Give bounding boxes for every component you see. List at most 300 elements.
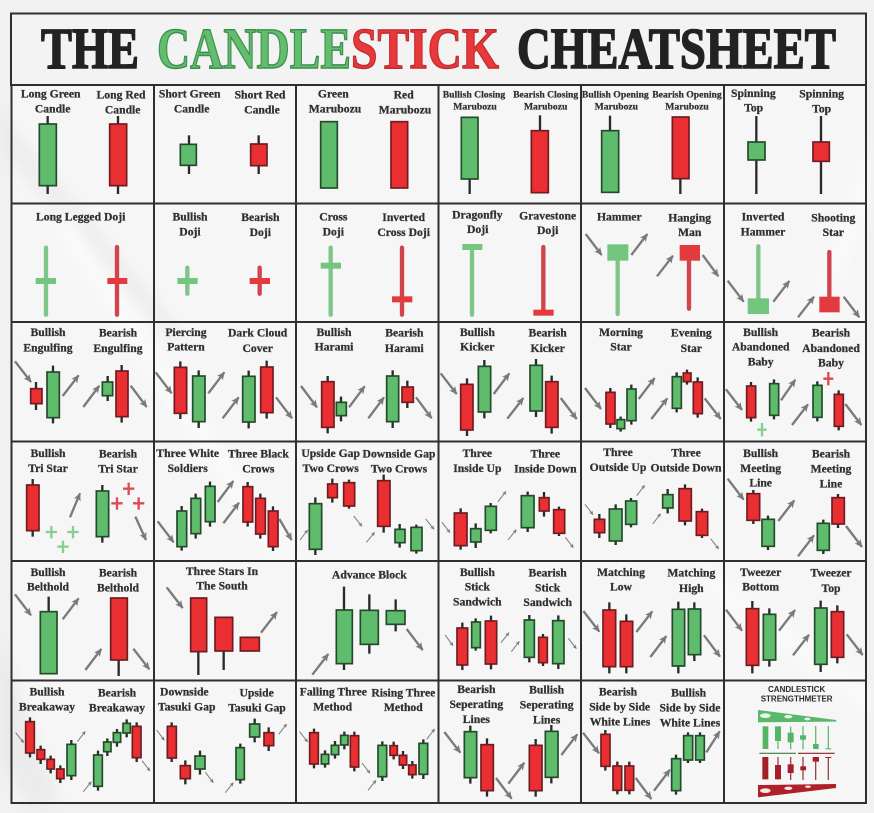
- label: Bearish Tri Star: Bearish: [99, 448, 138, 461]
- label: Bearish Engulfing: Engulfing: [93, 342, 143, 355]
- label: Three Inside Down: Three: [531, 448, 560, 461]
- label: Bullish Engulfing: Bullish: [30, 326, 66, 339]
- arrow: [501, 633, 509, 643]
- panel: long candles: [21, 88, 146, 194]
- arrow: [846, 526, 862, 547]
- label: Bullish Side by Side White Lines: White Lines: [660, 716, 721, 729]
- panel: opening marubozu: [582, 90, 722, 194]
- panel: spinning tops: [731, 87, 844, 194]
- candles: bearish harami: [387, 370, 413, 428]
- heading: strengthmeter: STRENGTHMETER: [761, 694, 833, 703]
- label: Bearish Meeting Line: Meeting: [811, 463, 852, 476]
- label: Bearish Doji: Bearish: [241, 211, 280, 224]
- arrow: [63, 375, 79, 396]
- label: Bearish Stick Sandwich: Bearish: [529, 567, 567, 580]
- bear banner: [758, 784, 836, 797]
- panel: abandoned baby: [726, 326, 861, 436]
- panel: three methods: [300, 686, 435, 790]
- label: Shooting Star: Shooting: [811, 211, 856, 224]
- arrow up: [657, 256, 673, 276]
- arrow: [16, 733, 24, 743]
- candles: tweezer top: [815, 601, 844, 672]
- arrow: [70, 493, 80, 517]
- panel: cross doji: [319, 210, 431, 315]
- arrow: [362, 763, 370, 773]
- panel: side by side: [583, 686, 721, 799]
- candles: bullish abandoned baby: [747, 379, 779, 436]
- panel: bullish bearish doji: [172, 210, 280, 294]
- label: Bearish Closing Marubozu: Bearish Closing: [513, 90, 578, 101]
- label: Downside Gap Two Crows: Two Crows: [371, 463, 428, 476]
- label: Bearish Opening Marubozu: Marubozu: [665, 101, 709, 112]
- arrow: [279, 724, 287, 734]
- label: Matching Low: Low: [610, 581, 633, 594]
- bull banner: [758, 710, 836, 722]
- label: Bearish Tri Star: Tri Star: [98, 463, 138, 476]
- title: [11, 14, 866, 85]
- arrow: [156, 372, 172, 393]
- label: Hanging Man: Hanging: [668, 211, 711, 224]
- candle: inverted hammer: [748, 246, 769, 314]
- arrow: [416, 397, 432, 418]
- panel: hammer hanging man: [586, 210, 718, 314]
- label: Tweezer Top: Tweezer: [810, 567, 852, 580]
- candle: green doji: [36, 248, 56, 315]
- label: Bearish Breakaway: Bearish: [98, 686, 137, 699]
- candle: dragonfly: [462, 244, 482, 315]
- arrow: [223, 503, 239, 523]
- candles: bearish tri star: [96, 483, 144, 543]
- arrow: [208, 372, 224, 393]
- arrow: [639, 378, 655, 399]
- arrow: [793, 635, 809, 655]
- arrow: [366, 532, 375, 542]
- label: Gravestone Doji: Doji: [537, 224, 559, 237]
- arrow: [781, 380, 795, 400]
- bullish strength candles: [763, 726, 831, 749]
- arrow: [798, 535, 814, 556]
- title: STICK: [351, 16, 499, 81]
- label: Falling Three Method: Method: [313, 700, 353, 713]
- arrow: [792, 404, 808, 425]
- label: Tweezer Bottom: Bottom: [742, 581, 779, 594]
- label: Bearish Seperating Lines: Seperating: [449, 698, 503, 711]
- candle: bullish doji: [177, 268, 198, 294]
- label: Bearish Kicker: Bearish: [529, 327, 567, 340]
- label: Inverted Cross Doji: Inverted: [382, 211, 426, 224]
- arrow: [585, 388, 601, 409]
- arrow: [301, 386, 317, 407]
- label: Three White Soldiers: Three White: [156, 447, 219, 460]
- panel: engulfing: [15, 326, 147, 423]
- arrow: [636, 611, 652, 632]
- arrow: [653, 514, 661, 524]
- candles: upside gap two crows: [309, 479, 355, 555]
- candles: upside tasuki gap: [236, 719, 274, 784]
- label: Three Outside Up: Outside Up: [590, 461, 647, 474]
- arrow: [711, 539, 719, 549]
- label: Bearish Kicker: Kicker: [531, 342, 565, 355]
- label: Upside Tasuki Gap: Upside: [239, 686, 274, 699]
- arrow: [279, 519, 292, 540]
- arrow: [637, 485, 645, 496]
- label: Hanging Man: Man: [678, 226, 702, 239]
- arrow: [63, 598, 79, 619]
- label: Bullish Meeting Line: Meeting: [740, 462, 781, 475]
- label: Long Red Candle: Long Red: [97, 88, 146, 101]
- candles: bullish tri star: [27, 479, 79, 553]
- arrow down: [703, 255, 718, 276]
- label: Bullish Kicker: Bullish: [460, 326, 495, 339]
- arrow: [427, 729, 435, 739]
- candle: bearish closing: [531, 115, 548, 193]
- arrow: [496, 778, 512, 799]
- arrow: [498, 491, 506, 502]
- arrow: [706, 731, 720, 752]
- label: Bearish Meeting Line: Line: [820, 477, 842, 490]
- label: Matching Low: Matching: [597, 566, 645, 579]
- arrow: [568, 638, 576, 649]
- candle: bullish opening: [602, 116, 619, 192]
- label: Bearish Stick Sandwich: Stick: [535, 581, 561, 594]
- label: Green Marubozu: Marubozu: [309, 103, 362, 116]
- arrow: [585, 504, 593, 515]
- arrow: [77, 731, 85, 742]
- arrow: [407, 629, 423, 650]
- label: Three Outside Up: Three: [603, 446, 633, 459]
- candle: red marubozu: [391, 122, 408, 188]
- arrow: [847, 634, 863, 655]
- label: Bearish Engulfing: Bearish: [99, 327, 138, 340]
- label: Three Black Crows: Three Black: [228, 448, 289, 461]
- candles: advance block: [336, 587, 405, 670]
- label: Inverted Cross Doji: Cross Doji: [377, 226, 431, 239]
- label: Spinning Top green: Spinning: [731, 87, 776, 100]
- candles: bullish engulfing: [31, 366, 59, 423]
- label: Bullish Side by Side White Lines: Bullish: [671, 686, 707, 699]
- candle: inverted cross doji: [392, 248, 412, 315]
- candles: evening star: [672, 370, 702, 418]
- candle: cross doji: [321, 248, 341, 315]
- label: Short Red Candle: Short Red: [235, 88, 286, 101]
- candle: green marubozu: [321, 122, 337, 188]
- bearish strength candles: [762, 757, 831, 780]
- label: Matching High: High: [679, 582, 704, 595]
- label: Bullish Abandoned Baby: Bullish: [743, 326, 779, 339]
- panel: tasuki gap: [157, 686, 287, 793]
- label: Bearish Abandoned Baby: Bearish: [812, 327, 851, 340]
- label: Bullish Breakaway: Breakaway: [19, 701, 75, 714]
- candle: red doji: [107, 247, 127, 315]
- label: Rising Three Method: Method: [384, 701, 423, 714]
- candle: hanging man: [680, 245, 700, 309]
- panel: long legged doji: [36, 210, 127, 315]
- arrow: [779, 610, 795, 631]
- arrow: [225, 783, 233, 793]
- label: Tweezer Top: Top: [821, 582, 841, 595]
- candles: three white soldiers: [177, 482, 215, 551]
- arrow: [83, 386, 99, 407]
- arrow: [726, 389, 742, 410]
- candles: downside tasuki gap: [167, 722, 205, 784]
- candles: bearish meeting line: [817, 494, 844, 554]
- panel: gap two crows: [300, 447, 436, 555]
- label: Bullish Harami: Bullish: [316, 326, 352, 339]
- title: THE: [41, 16, 139, 81]
- label: Red Marubozu: Red: [394, 88, 414, 101]
- label: Bearish Seperating Lines: Lines: [463, 713, 490, 726]
- arrow: [261, 612, 277, 633]
- label: Bullish Stick Sandwich: Bullish: [460, 566, 495, 579]
- label: Long Green Candle: Long Green: [21, 88, 81, 101]
- label: Inverted Hammer: Hammer: [741, 226, 785, 239]
- label: Bullish Closing Marubozu: Bullish Closing: [443, 90, 505, 101]
- label: Bearish Meeting Line: Bearish: [812, 448, 851, 461]
- panel: marubozu: [309, 88, 432, 188]
- label: Short Green Candle: Candle: [174, 103, 209, 116]
- panel: three soldiers crows: [156, 447, 292, 551]
- panel: tri star: [27, 447, 146, 553]
- candles: downside gap two crows: [378, 475, 422, 554]
- candles: bullish separating: [529, 725, 558, 797]
- candles: bullish harami: [322, 376, 346, 433]
- label: Advance Block: Advance Block: [332, 568, 407, 581]
- arrow: [494, 373, 509, 394]
- label: Bearish Abandoned Baby: Baby: [818, 357, 844, 370]
- label: Downside Gap Two Crows: Downside Gap: [363, 448, 436, 461]
- label: Bearish Opening Marubozu: Bearish Opening: [652, 90, 722, 101]
- candles: bullish meeting line: [747, 490, 774, 550]
- label: Inverted Hammer: Inverted: [742, 211, 785, 224]
- panel: advance block: [312, 568, 423, 675]
- label: Bullish Doji: Doji: [179, 225, 201, 238]
- arrow: [651, 398, 667, 419]
- panel: stick sandwich: [445, 566, 576, 670]
- candles: piercing pattern: [174, 361, 205, 428]
- arrow up: [798, 297, 814, 317]
- arrow: [636, 778, 651, 799]
- arrow: [135, 517, 146, 540]
- panel: dragonfly gravestone: [452, 209, 576, 316]
- label: Three Stars In The South: The South: [196, 580, 248, 593]
- arrow: [368, 780, 376, 790]
- label: Bullish Belthold: Bullish: [30, 566, 66, 579]
- label: Three Black Crows: Crows: [242, 463, 275, 476]
- label: Bullish Side by Side White Lines: Side by Side: [660, 701, 720, 714]
- arrow: [142, 761, 150, 771]
- label: Bullish Seperating Lines: Lines: [533, 713, 561, 726]
- label: Bullish Doji: Bullish: [172, 210, 208, 223]
- panel: three stars in the south: [167, 565, 277, 675]
- candle: spinning top red: [813, 116, 829, 194]
- arrow: [728, 479, 744, 500]
- arrow: [83, 782, 91, 792]
- panel: inverted hammer shooting star: [728, 211, 859, 317]
- panel: short candles: [159, 88, 286, 174]
- candle: long red: [110, 116, 127, 194]
- candles: three inside up: [454, 503, 496, 550]
- candles: bullish breakaway: [26, 717, 76, 783]
- arrow: [276, 397, 292, 418]
- panel: matching low high: [583, 566, 720, 673]
- candles: falling three: [310, 729, 359, 771]
- label: Upside Gap Two Crows: Two Crows: [303, 462, 359, 475]
- label: Spinning Top green: Top: [744, 102, 764, 115]
- label: Hammer: Hammer: [597, 210, 642, 223]
- label: Bullish Engulfing: Engulfing: [23, 341, 73, 354]
- candle: bearish belthold: [111, 598, 127, 676]
- label: Bullish Opening Marubozu: Marubozu: [595, 101, 639, 112]
- panel: candlestick strengthmeter: [758, 685, 836, 797]
- candles: tweezer bottom: [746, 601, 776, 673]
- label: Morning Star: Morning: [599, 326, 643, 339]
- label: Dragonfly Doji: Doji: [467, 223, 489, 236]
- arrow: [300, 530, 308, 540]
- arrow: [705, 398, 721, 419]
- label: Bullish Seperating Lines: Seperating: [520, 698, 574, 711]
- label: Bullish Tri Star: Bullish: [30, 447, 66, 460]
- label: Bearish Seperating Lines: Bearish: [457, 683, 496, 696]
- candle: shooting star: [819, 252, 840, 312]
- label: Bullish Closing Marubozu: Marubozu: [453, 101, 497, 112]
- label: Bearish Breakaway: Breakaway: [89, 701, 145, 714]
- label: Three Outside Down: Three: [671, 447, 701, 460]
- arrow: [508, 530, 516, 540]
- arrow down: [844, 297, 859, 317]
- candle: spinning top green: [748, 116, 765, 194]
- label: Bullish Meeting Line: Line: [749, 477, 772, 490]
- label: Spinning Top red: Top: [812, 102, 832, 115]
- label: Tweezer Bottom: Tweezer: [740, 566, 781, 579]
- arrow: [223, 397, 239, 418]
- label: Bearish Abandoned Baby: Abandoned: [802, 342, 860, 355]
- label: Upside Tasuki Gap: Tasuki Gap: [228, 701, 286, 714]
- candle: gravestone: [533, 247, 554, 316]
- panel: belthold: [15, 566, 149, 676]
- label: Bullish Seperating Lines: Bullish: [529, 683, 565, 696]
- panel: three outside: [585, 446, 722, 549]
- label: Spinning Top red: Spinning: [799, 88, 844, 101]
- label: Gravestone Doji: Gravestone: [519, 209, 576, 222]
- label: Bullish Meeting Line: Bullish: [743, 447, 779, 460]
- candles: bearish stick sandwich: [524, 615, 564, 669]
- arrow: [312, 654, 328, 675]
- panel: closing marubozu: [443, 90, 578, 194]
- label: Piercing Pattern: Pattern: [167, 341, 205, 354]
- candles: three outside down: [663, 484, 708, 538]
- panel: piercing dark cloud: [156, 326, 292, 428]
- candle: bullish closing: [461, 117, 478, 194]
- arrow: [157, 730, 164, 740]
- label: Bullish Stick Sandwich: Sandwich: [453, 596, 502, 609]
- label: Bearish Belthold: Bearish: [99, 567, 138, 580]
- label: Dark Cloud Cover: Cover: [242, 342, 273, 355]
- panel: tweezer: [726, 566, 863, 673]
- label: Green Marubozu: Green: [318, 88, 349, 101]
- label: Bearish Side by Side White Lines: Side by Side: [589, 701, 650, 714]
- label: Three Outside Down: Outside Down: [651, 462, 722, 475]
- label: Bullish Harami: Harami: [315, 341, 354, 354]
- label: Bearish Closing Marubozu: Marubozu: [524, 101, 568, 112]
- divider: [759, 752, 796, 755]
- label: Bullish Stick Sandwich: Stick: [465, 581, 490, 594]
- arrow: [442, 522, 450, 533]
- label: Matching High: Matching: [667, 567, 715, 580]
- label: Bearish Belthold: Belthold: [97, 581, 140, 594]
- panel: meeting line: [728, 447, 862, 556]
- arrow: [511, 641, 519, 652]
- candles: three inside down: [521, 492, 565, 536]
- label: Dark Cloud Cover: Dark Cloud: [228, 327, 288, 340]
- candle: bearish opening: [672, 117, 689, 194]
- candles: rising three: [378, 739, 428, 781]
- label: Three Inside Down: Inside Down: [514, 463, 577, 476]
- arrow: [650, 636, 666, 657]
- arrow: [561, 734, 577, 755]
- arrow: [561, 398, 577, 419]
- label: Bullish Belthold: Belthold: [27, 581, 70, 594]
- label: Three Inside Up: Inside Up: [453, 462, 502, 475]
- candles: bearish breakaway: [94, 719, 141, 791]
- label: Long Red Candle: Candle: [105, 103, 140, 116]
- label: Three White Soldiers: Soldiers: [168, 462, 208, 475]
- label: Bullish Breakaway: Bullish: [29, 686, 65, 699]
- arrow: [15, 594, 31, 615]
- arrow: [15, 361, 31, 382]
- arrow: [205, 772, 213, 783]
- label: Downside Tasuki Gap: Downside: [160, 686, 209, 699]
- panel: three inside: [442, 447, 577, 550]
- arrow: [583, 733, 599, 753]
- arrow: [508, 763, 524, 784]
- label: Evening Star: Star: [681, 342, 702, 355]
- candles: bullish kicker: [461, 360, 491, 436]
- candles: matching low: [603, 602, 633, 673]
- arrow: [426, 519, 434, 529]
- arrow: [583, 611, 599, 632]
- candles: three stars: [191, 598, 259, 675]
- arrow: [778, 500, 794, 521]
- arrow: [368, 397, 384, 418]
- label: Dragonfly Doji: Dragonfly: [452, 209, 503, 222]
- candle: short green: [180, 135, 196, 174]
- candles: bearish abandoned baby: [813, 372, 843, 430]
- candles: three outside up: [594, 498, 637, 545]
- candle: bullish belthold: [40, 597, 57, 674]
- label: Three Inside Up: Three: [463, 447, 492, 460]
- label: Long Green Candle: Candle: [35, 103, 70, 116]
- label: Upside Gap Two Crows: Upside Gap: [301, 447, 360, 460]
- arrow down: [586, 234, 602, 255]
- label: Red Marubozu: Marubozu: [379, 103, 432, 116]
- label: Cross Doji: Doji: [323, 225, 345, 238]
- arrow: [704, 635, 720, 657]
- label: Bearish Harami: Harami: [385, 342, 425, 355]
- arrow: [158, 521, 174, 542]
- heading: strengthmeter: CANDLESTICK: [768, 685, 825, 694]
- panel: separating lines: [444, 683, 577, 799]
- arrow: [85, 649, 101, 670]
- label: Bearish Side by Side White Lines: Bearish: [599, 686, 638, 699]
- label: Bullish Kicker: Kicker: [460, 341, 494, 354]
- candle: short red: [251, 135, 267, 174]
- arrow: [654, 770, 670, 791]
- arrow: [300, 732, 308, 742]
- panel: kicker: [441, 326, 577, 436]
- label: Falling Three Method: Falling Three: [300, 686, 367, 699]
- arrow: [133, 649, 149, 669]
- label: Morning Star: Star: [610, 341, 632, 354]
